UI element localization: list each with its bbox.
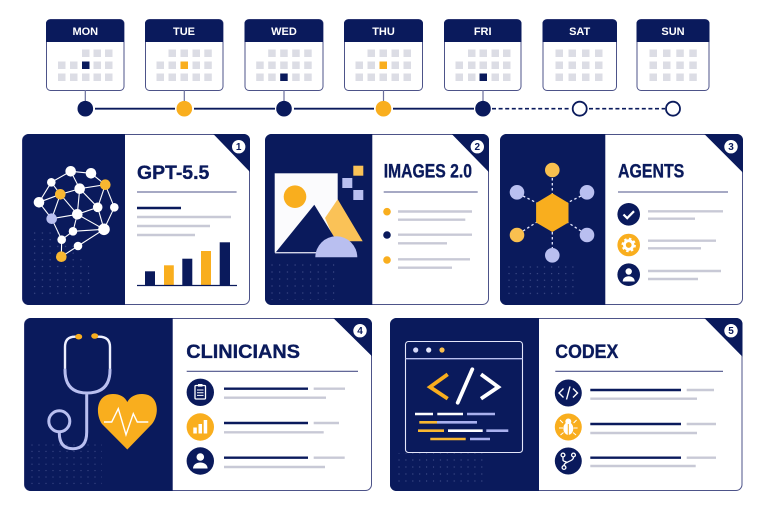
timeline node: Thursday: [376, 101, 391, 116]
badge 1: [232, 140, 245, 153]
calendar: Monday: [46, 20, 124, 90]
text lines: [137, 208, 231, 235]
timeline node: Tuesday: [176, 101, 192, 116]
weekly calendar row: [46, 20, 710, 90]
list row: person: [187, 447, 345, 475]
calendar: Tuesday: TUE: [173, 26, 195, 38]
badge 3: 3: [728, 142, 734, 153]
bullet list: [383, 208, 472, 268]
list row: chart: [187, 413, 339, 441]
calendar: Saturday: SAT: [569, 26, 591, 38]
calendar: Wednesday: [244, 20, 323, 90]
badge 4: [353, 324, 367, 337]
timeline node: Wednesday: [276, 101, 292, 116]
panel: GPT-5.5: [22, 134, 250, 305]
timeline node: Friday: [475, 101, 491, 116]
bar chart: [137, 242, 237, 286]
list row: clipboard: [187, 379, 345, 406]
list row: code: [555, 380, 714, 406]
illustration: hub and nodes: [510, 163, 594, 263]
illustration: stethoscope: [49, 333, 110, 449]
heading: Clinicians: CLINICIANS: [186, 342, 300, 363]
calendar: Monday: MON: [72, 26, 98, 38]
timeline node: Sunday: [666, 102, 680, 116]
timeline node: Monday: [78, 101, 93, 116]
calendar: Sunday: [636, 20, 710, 90]
heading: Images 2.0: IMAGES 2.0: [384, 162, 472, 183]
panel: Clinicians: [24, 318, 372, 491]
calendar: Wednesday: WED: [271, 26, 297, 38]
calendar: Thursday: THU: [372, 26, 395, 38]
panel: Codex: [390, 318, 742, 491]
list row: gear: [617, 234, 716, 256]
panel: Images 2.0: [265, 134, 489, 305]
heading: GPT-5.5: GPT-5.5: [137, 163, 210, 184]
calendar: Sunday: SUN: [661, 26, 685, 38]
badge 3: [724, 140, 738, 153]
icon: heart with pulse: [98, 394, 157, 450]
panel: Agents: [500, 134, 743, 305]
badge 4: 4: [357, 326, 363, 337]
list row: bug: [555, 414, 716, 440]
calendar: Friday: FRI: [474, 26, 492, 38]
badge 2: 2: [475, 142, 481, 153]
list row: check: [617, 203, 723, 226]
calendar: Thursday: [344, 20, 423, 90]
list row: person: [617, 263, 721, 286]
calendar: Tuesday: [145, 20, 223, 90]
list row: git branch: [555, 448, 716, 474]
illustration: picture with mountain: [275, 166, 363, 257]
badge 2: [471, 140, 484, 153]
badge 5: [724, 324, 738, 337]
calendar: Saturday: [542, 20, 617, 90]
timeline node: Saturday: [573, 102, 587, 116]
illustration: code window: [406, 342, 522, 452]
badge 5: 5: [728, 326, 734, 337]
timeline: [78, 90, 680, 116]
illustration: neural brain: [34, 166, 119, 262]
heading: Codex: CODEX: [555, 342, 619, 363]
calendar: Friday: [444, 20, 522, 90]
badge 1: 1: [236, 142, 242, 153]
heading: Agents: AGENTS: [618, 162, 684, 183]
